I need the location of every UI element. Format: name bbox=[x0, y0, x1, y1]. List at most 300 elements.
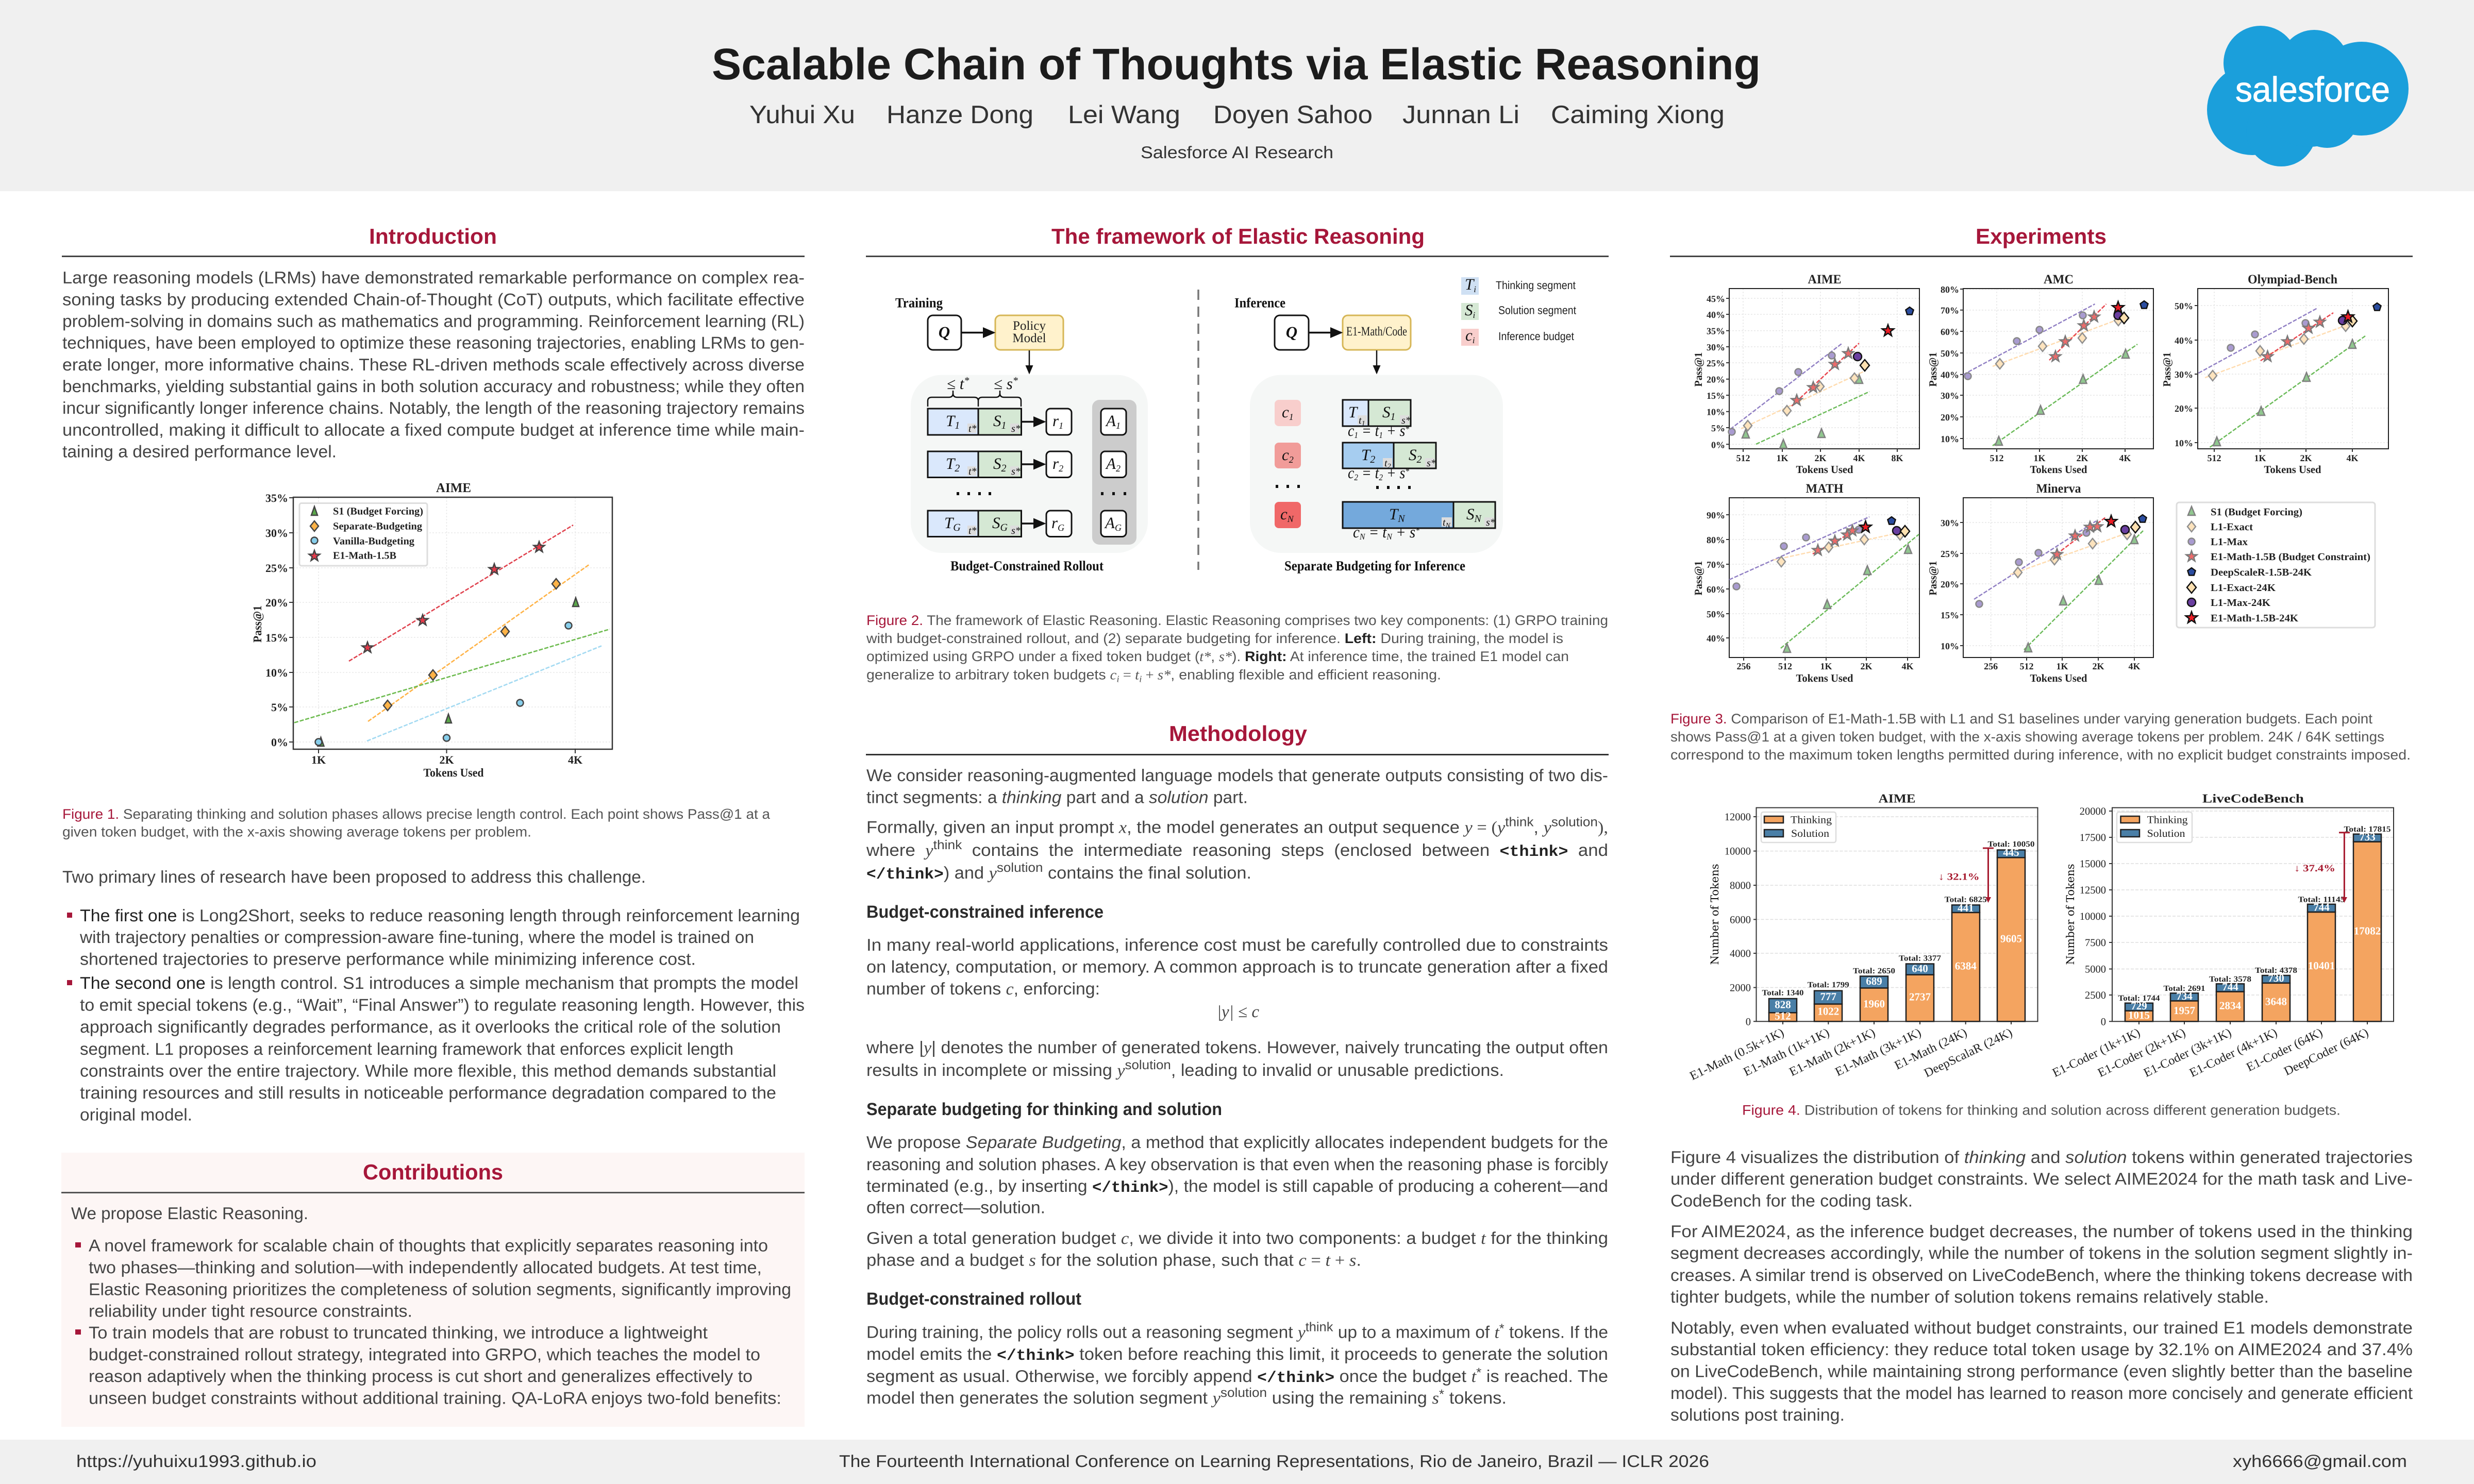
text block: budget-constrained rollout: * bbox=[1499, 1321, 1505, 1336]
legend: segment colours: S bbox=[1465, 301, 1473, 319]
x-axis labels: E1-Coder (3k+1K) bbox=[2142, 1026, 2234, 1080]
list: research lines: The second one is length control. S1 introduces a simple mechanism that prompts the model bbox=[80, 973, 798, 992]
budget segments: T bbox=[1389, 505, 1398, 523]
text block: problem setting: solution bbox=[1551, 815, 1598, 830]
axis tick labels: 25% bbox=[265, 562, 288, 575]
budget segments: t bbox=[1384, 458, 1388, 469]
chart: figure 3 MATH: 512 bbox=[1778, 661, 1792, 671]
budget segments: c bbox=[1348, 421, 1355, 440]
chart: figure 3 AIME: Tokens Used bbox=[1796, 463, 1853, 476]
axis tick labels: 30% bbox=[265, 527, 288, 539]
panel: framework of elastic reasoning bbox=[866, 224, 1609, 684]
chart: figure 3 Minerva: 20% bbox=[1941, 579, 1959, 589]
chart: figure 3 Minerva: 30% bbox=[1941, 518, 1959, 528]
axis tick labels: 1K bbox=[311, 753, 326, 766]
list: contributions bullets: Elastic Reasoning prioritizes the completeness of solution segments, significantly improving bbox=[89, 1280, 791, 1298]
bar values: Total: 1799 bbox=[1808, 981, 1849, 989]
rollout rows: G bbox=[1000, 522, 1008, 533]
text block: problem setting: ), bbox=[1598, 819, 1608, 837]
bar values: 9605 bbox=[2000, 933, 2022, 945]
rollout rows: S bbox=[992, 514, 1000, 532]
figure 2 caption: i bbox=[1139, 674, 1142, 684]
bar values: Total: 11145 bbox=[2298, 895, 2345, 904]
rollout rows: t* bbox=[968, 466, 977, 477]
chart: figure 3 AMC: 70% bbox=[1941, 306, 1959, 316]
bar values: 1015 bbox=[2128, 1009, 2150, 1021]
chart: figure 3 AIME: 0% bbox=[1711, 440, 1725, 450]
bar values bbox=[1762, 840, 2035, 1022]
bar values: 744 bbox=[2222, 981, 2238, 993]
legend: Solution bbox=[1791, 828, 1829, 839]
text block: problem setting: </think>) and y bbox=[866, 863, 996, 884]
chart: figure 3 AMC: AMC bbox=[2044, 273, 2074, 286]
header band bbox=[0, 0, 2474, 191]
list: research lines: original model. bbox=[80, 1105, 192, 1124]
legend: segment colours: c bbox=[1465, 326, 1473, 344]
text block: budget-constrained rollout: * bbox=[1476, 1365, 1482, 1380]
text block: separate budgeting: terminated (e.g., by inserting </think>), the model is still capable of producing a coherent—and bbox=[866, 1176, 1608, 1197]
figure 1 caption: Figure 1. Separating thinking and solution phases allows precise length control. Each point shows Pass@1 at a bbox=[62, 806, 771, 822]
list: contributions bullets: budget-constrained rollout strategy, integrated into GRPO, which teaches the model to bbox=[89, 1345, 760, 1364]
chart: figure 3 MATH: 1K bbox=[1820, 661, 1832, 671]
chart: figure 3 Minerva: Minerva bbox=[2036, 482, 2081, 496]
figure 1 caption: given token budget, with the x-axis showing average tokens per problem. bbox=[62, 824, 531, 840]
text block: experiments discussion: segment decreases accordingly, while the number of tokens in the solution segment slightly in- bbox=[1670, 1243, 2413, 1262]
chart: figure 3 Minerva: 2K bbox=[2092, 661, 2104, 671]
authors: Hanze Dong bbox=[887, 101, 1033, 129]
training diagram: Q bbox=[939, 323, 950, 341]
list: research lines: to emit special tokens (e.g., “Wait”, “Final Answer”) to regulate reasoning length. However, this bbox=[80, 996, 805, 1015]
text block: experiments discussion: substantial token efficiency: they reduce total token usage by 32.1% on AIME2024 and 37.4% bbox=[1670, 1340, 2413, 1359]
figure 3 caption: shows Pass@1 at a given token budget, with the x-axis showing average tokens per problem. 24K / 64K settings bbox=[1670, 729, 2384, 745]
chart: figure 3 MATH: 60% bbox=[1707, 584, 1725, 595]
text block: budget-constrained rollout: up to a maximum of bbox=[1333, 1322, 1494, 1342]
legend bbox=[1761, 812, 1836, 842]
legend: segment colours: i bbox=[1474, 284, 1476, 294]
budget segments: N bbox=[1386, 532, 1393, 542]
chart: figure 4 AIME stacked bars: 8000 bbox=[1730, 880, 1751, 891]
chart: figure 3 Olympiad-Bench: 20% bbox=[2175, 403, 2193, 414]
chart: figure 3 AMC: 2K bbox=[2076, 453, 2088, 463]
text block: problem setting: where y bbox=[866, 840, 933, 860]
budget segments: s* bbox=[1427, 458, 1436, 469]
text block: research lines lead-in: Two primary lines of research have been proposed to address this challenge. bbox=[62, 867, 646, 886]
bar values: 828 bbox=[1775, 998, 1791, 1010]
rollout rows: t* bbox=[968, 525, 977, 536]
chart: figure 3 MATH: 256 bbox=[1737, 661, 1750, 671]
text block: experiments discussion: For AIME2024, as the inference budget decreases, the number of tokens used in the thinking bbox=[1670, 1222, 2413, 1241]
text block: budget-constrained inference: number of tokens c, enforcing: bbox=[866, 979, 1100, 999]
chart: figure 3 Olympiad-Bench: 50% bbox=[2175, 301, 2193, 311]
chart: figure 3 Olympiad-Bench: 512 bbox=[2207, 453, 2221, 463]
rollout rows: G bbox=[953, 522, 961, 533]
x-axis labels: E1-Math (3k+1K) bbox=[1833, 1026, 1924, 1079]
text block: contributions intro: We propose Elastic Reasoning. bbox=[71, 1204, 308, 1223]
budget segments: 2 bbox=[1388, 463, 1391, 470]
legend: E1-Math-1.5B bbox=[333, 550, 396, 562]
figure 2 caption: i bbox=[1116, 674, 1119, 684]
chart: figure 4 LiveCodeBench stacked bars: 0 bbox=[2101, 1016, 2106, 1027]
budget segments: = t bbox=[1358, 464, 1380, 482]
budget braces: * bbox=[964, 375, 969, 386]
figure 1 caption bbox=[62, 806, 771, 840]
icon: salesforce cloud logo bbox=[2207, 26, 2409, 166]
legend bbox=[2117, 812, 2192, 842]
chart: figure 3 Olympiad-Bench bbox=[2161, 273, 2388, 476]
chart: figure 3 MATH bbox=[1692, 482, 1919, 684]
legend: segment colours: i bbox=[1473, 335, 1475, 345]
list: research lines: segment. L1 proposes a reinforcement learning framework that enforces explicit length bbox=[80, 1039, 733, 1058]
bars bbox=[2125, 834, 2381, 1021]
chart: figure 3 Olympiad-Bench: 40% bbox=[2175, 335, 2193, 346]
rollout rows: G bbox=[1058, 522, 1064, 533]
bar values: 1960 bbox=[1863, 998, 1885, 1010]
rollout rows: r bbox=[1052, 454, 1059, 473]
text block: budget-constrained inference: results in incomplete or missing y bbox=[866, 1060, 1125, 1080]
chart: figure 3 MATH: 70% bbox=[1707, 560, 1725, 570]
footer: email: xyh6666@gmail.com bbox=[2233, 1452, 2407, 1471]
legend: figure 3: L1-Exact bbox=[2211, 521, 2253, 533]
budget segments: N bbox=[1445, 522, 1451, 530]
legend: segment colours: Thinking segment bbox=[1496, 279, 1576, 292]
axis tick labels: 20% bbox=[265, 596, 288, 609]
budget segments: 1 bbox=[1379, 430, 1383, 440]
inference diagram: Q bbox=[1286, 323, 1297, 341]
answer column: A bbox=[1105, 514, 1115, 532]
budget segments: 2 bbox=[1370, 454, 1375, 465]
chart: figure 4 AIME stacked bars: 10000 bbox=[1725, 846, 1751, 857]
authors: Junnan Li bbox=[1402, 101, 1519, 129]
data points bbox=[315, 542, 579, 746]
list: contributions bullets: A novel framework for scalable chain of thoughts that explicitly separates reasoning into bbox=[89, 1236, 768, 1255]
figure 3 caption: Figure 3. Comparison of E1-Math-1.5B with L1 and S1 baselines under varying generation budgets. Each point bbox=[1670, 711, 2373, 727]
text block: introduction paragraph: incur significantly longer inference chains. Notably, the length of the reasoning trajectory remains bbox=[62, 398, 805, 417]
axis label: pass at 1: Pass@1 bbox=[251, 605, 264, 643]
text block: problem setting bbox=[866, 766, 1608, 884]
training diagram: Model bbox=[1012, 331, 1046, 345]
legend: S1 (Budget Forcing) bbox=[333, 506, 423, 517]
legend: figure 3: L1-Max bbox=[2211, 536, 2248, 548]
list: research lines: The first one is Long2Short, seeks to reduce reasoning length through reinforcement learning bbox=[80, 906, 800, 925]
arrow: reduction 37.4% bbox=[2294, 833, 2350, 903]
text block: budget-constrained rollout: During training, the policy rolls out a reasoning segment y bbox=[866, 1322, 1306, 1342]
x-axis labels bbox=[2050, 1026, 2371, 1080]
rollout rows: 2 bbox=[1001, 463, 1006, 474]
x-axis labels bbox=[1687, 1026, 2015, 1083]
training diagram: Policy bbox=[1013, 319, 1046, 333]
answer column: 1 bbox=[1116, 420, 1121, 431]
chart: figure 4 AIME stacked bars: 6000 bbox=[1730, 914, 1751, 925]
figure 4 caption: Figure 4. Distribution of tokens for thinking and solution across different generation budgets. bbox=[1742, 1103, 2341, 1118]
heading: framework: The framework of Elastic Reasoning bbox=[1051, 224, 1425, 248]
chart: figure 3 AIME: 512 bbox=[1736, 453, 1750, 463]
figure 2 caption: s*, enabling flexible and efficient reasoning. bbox=[1158, 667, 1426, 682]
text block: problem setting: think bbox=[933, 838, 962, 852]
rollout rows: T bbox=[946, 412, 955, 430]
list: research lines: constraints over the entire trajectory. While more flexible, this method demands substantial bbox=[80, 1061, 776, 1080]
chart: figure 3 AMC: 60% bbox=[1941, 327, 1959, 337]
bar values: 733 bbox=[2359, 831, 2376, 843]
rollout rows: r bbox=[1052, 412, 1059, 430]
axis tick labels: 10% bbox=[265, 666, 288, 679]
bar values bbox=[2118, 825, 2391, 1021]
text block: separate budgeting bbox=[866, 1133, 1608, 1270]
budget segments: * bbox=[1405, 466, 1409, 476]
chart: figure 3 AIME: 4K bbox=[1853, 453, 1865, 463]
inference diagram: E1-Math/Code bbox=[1346, 325, 1407, 339]
rollout rows: S bbox=[993, 454, 1001, 473]
budget segments: 2 bbox=[1379, 473, 1383, 482]
chart: figure 3 AMC: 50% bbox=[1941, 348, 1959, 359]
trend lines bbox=[294, 525, 610, 741]
bar values: 730 bbox=[2268, 972, 2284, 984]
bar values: 729 bbox=[2131, 1000, 2147, 1012]
chart: figure 3 Minerva: 10% bbox=[1941, 641, 1959, 651]
budget segments: + s bbox=[1392, 523, 1415, 541]
chart: figure 4 AIME stacked bars: AIME bbox=[1878, 792, 1915, 806]
budget segments: s* bbox=[1401, 415, 1411, 426]
answer column bbox=[1092, 400, 1136, 545]
arrow: reduction 32.1%: ↓ 32.1% bbox=[1938, 872, 1980, 882]
bar values: 2737 bbox=[1909, 991, 1931, 1003]
affiliation: Salesforce AI Research bbox=[1141, 143, 1333, 162]
list: research lines bbox=[67, 906, 805, 1124]
chart: figure 4 AIME stacked bars: 4000 bbox=[1730, 948, 1751, 959]
text block: budget-constrained rollout bbox=[866, 1320, 1608, 1408]
figure 2 caption: Figure 2. The framework of Elastic Reasoning. Elastic Reasoning comprises two key components: (1) GRPO training bbox=[866, 613, 1608, 628]
axis tick labels: 15% bbox=[265, 631, 288, 644]
caption: separate budgeting: Separate Budgeting for Inference bbox=[1284, 558, 1465, 574]
text block: problem setting: , bbox=[1533, 818, 1544, 837]
bar values: Total: 17815 bbox=[2344, 825, 2391, 834]
chart: figure 3 AMC bbox=[1927, 273, 2153, 476]
list: contributions bullets: reliability under tight resource constraints. bbox=[89, 1302, 412, 1321]
chart: figure 3 Minerva: 256 bbox=[1984, 661, 1998, 671]
chart: figure 3 AIME: 5% bbox=[1711, 423, 1725, 433]
list: contributions bullets: To train models that are robust to truncated thinking, we introduce a lightweight bbox=[89, 1323, 708, 1342]
equation: |y| ≤ c bbox=[1217, 1003, 1259, 1021]
chart: figure 3 MATH: 80% bbox=[1707, 535, 1725, 545]
inference diagram bbox=[1234, 295, 1503, 574]
chart: figure 3 AIME: 45% bbox=[1707, 294, 1725, 304]
x-axis labels: E1-Math (0.5k+1K) bbox=[1687, 1026, 1786, 1083]
rollout rows: 1 bbox=[1001, 420, 1006, 431]
chart: figure 3 AIME: 30% bbox=[1707, 342, 1725, 352]
text block: experiments discussion: Notably, even when evaluated without budget constraints, our trained E1 models demonstrate bbox=[1670, 1318, 2413, 1337]
legend: Thinking bbox=[1791, 815, 1832, 826]
text block: budget-constrained rollout: model emits the </think> token before reaching this limit, it proceeds to generate the solution bbox=[866, 1344, 1608, 1365]
x-axis labels: DeepScalaR (24K) bbox=[1922, 1026, 2015, 1080]
budget chips: c bbox=[1282, 446, 1289, 464]
bar values: 441 bbox=[1958, 902, 1974, 914]
budget segments: T bbox=[1348, 403, 1359, 421]
budget segments: 2 bbox=[1354, 473, 1358, 482]
legend: figure 3: S1 (Budget Forcing) bbox=[2211, 507, 2302, 518]
chart: figure 3 AMC: 40% bbox=[1941, 370, 1959, 380]
chart: figure 4 AIME stacked bars: 2000 bbox=[1730, 982, 1751, 993]
chart: figure 3 Olympiad-Bench: 1K bbox=[2254, 453, 2266, 463]
list: contributions bullets bbox=[75, 1236, 791, 1408]
chart: figure 3 AMC: 20% bbox=[1941, 412, 1959, 423]
list: research lines: training resources and still results in noticeable performance degradation compared to the bbox=[80, 1083, 776, 1102]
figure 2 caption bbox=[866, 613, 1608, 684]
budget segments: 2 bbox=[1416, 454, 1422, 465]
chart: figure 3 AMC: Pass@1 bbox=[1927, 352, 1939, 386]
authors: Lei Wang bbox=[1068, 101, 1180, 129]
budget segments: N bbox=[1359, 532, 1366, 542]
bar values: 6384 bbox=[1955, 960, 1977, 972]
chart: figure 3 Olympiad-Bench: Olympiad-Bench bbox=[2248, 273, 2337, 286]
answer column: G bbox=[1115, 522, 1122, 533]
figure 2 caption: + bbox=[1142, 667, 1158, 682]
legend: figure 3 bbox=[2177, 502, 2375, 628]
budget segments: = t bbox=[1358, 421, 1380, 440]
text block: introduction paragraph: techniques, have been employed to optimize these reasoning trajectories, enabling LRMs to gen- bbox=[62, 333, 805, 352]
budget chips: c bbox=[1282, 403, 1289, 421]
chart: figure 4 AIME stacked bars: Number of Tokens bbox=[1709, 864, 1721, 965]
legend: figure 3: E1-Math-1.5B-24K bbox=[2211, 613, 2298, 624]
chart: figure 3 MATH: Tokens Used bbox=[1796, 672, 1853, 684]
chart: figure 3 MATH: 40% bbox=[1707, 633, 1725, 644]
list: research lines: shortened trajectories to preserve performance while minimizing inference cost. bbox=[80, 949, 696, 968]
authors: Doyen Sahoo bbox=[1213, 101, 1373, 129]
chart: figure 3 Minerva: 25% bbox=[1941, 549, 1959, 559]
legend: Thinking bbox=[2147, 815, 2188, 826]
chart: figure 3 AIME bbox=[1692, 273, 1919, 476]
rollout rows: 1 bbox=[1059, 420, 1063, 431]
answer column: A bbox=[1106, 412, 1116, 430]
label: training: Training bbox=[895, 295, 943, 310]
budget segments: * bbox=[1415, 526, 1419, 535]
bar values: Total: 3377 bbox=[1899, 954, 1941, 963]
legend: segment colours: Inference budget bbox=[1498, 330, 1574, 343]
text block: budget-constrained inference: on latency, computation, or memory. A common approach is to truncate generation after a fixed bbox=[866, 957, 1608, 976]
budget chips bbox=[1275, 400, 1301, 528]
chart: figure 3 MATH: 2K bbox=[1860, 661, 1873, 671]
budget segments: + s bbox=[1383, 464, 1405, 482]
chart: figure 4 LiveCodeBench stacked bars: 12500 bbox=[2080, 885, 2106, 896]
list: contributions bullets: unseen budget constraints without additional training. QA-LoRA enjoys two-fold benefits: bbox=[89, 1389, 781, 1408]
legend: segment colours: Solution segment bbox=[1498, 304, 1576, 316]
x-axis labels: E1-Math (24K) bbox=[1893, 1026, 1969, 1072]
text block: budget-constrained rollout: * bbox=[1439, 1387, 1444, 1402]
chart: figure 3 Olympiad-Bench: 30% bbox=[2175, 369, 2193, 380]
text block: budget-constrained rollout: tokens. If the bbox=[1505, 1322, 1608, 1342]
rollout rows: T bbox=[944, 514, 953, 532]
chart: figure 3 AIME: 8K bbox=[1891, 453, 1903, 463]
budget segments bbox=[1343, 400, 1495, 542]
axis tick labels: 0% bbox=[271, 736, 288, 749]
budget chips: 1 bbox=[1289, 412, 1294, 422]
budget segments: * bbox=[1405, 424, 1409, 434]
budget chips: 2 bbox=[1289, 454, 1294, 465]
text block: budget-constrained rollout: s bbox=[1432, 1389, 1439, 1408]
chart: figure 3 AMC: 1K bbox=[2033, 453, 2046, 463]
answer column: 2 bbox=[1116, 463, 1121, 474]
list: contributions bullets: two phases—thinking and solution—with independently allocated budgets. At test time, bbox=[89, 1258, 762, 1277]
budget braces bbox=[928, 375, 1021, 407]
budget chips: N bbox=[1287, 514, 1294, 524]
training diagram bbox=[895, 295, 1148, 574]
chart: figure 3 AIME: 40% bbox=[1707, 310, 1725, 320]
chart: figure 3 Olympiad-Bench: Pass@1 bbox=[2161, 352, 2173, 386]
figure 2 caption: optimized using GRPO under a fixed token budget ( t*, s*). Right: At inference time, the trained E1 model can bbox=[866, 649, 1569, 664]
bar values: 734 bbox=[2176, 990, 2193, 1002]
budget braces: * bbox=[1013, 375, 1018, 386]
chart: figure 3 Minerva: 15% bbox=[1941, 610, 1959, 620]
footer band bbox=[0, 1440, 2474, 1484]
text block: budget-constrained rollout: t bbox=[1494, 1323, 1500, 1342]
chart: figure 4 AIME stacked bars: 0 bbox=[1746, 1016, 1751, 1027]
chart: figure 3 Olympiad-Bench: Tokens Used bbox=[2264, 463, 2321, 476]
text block: introduction paragraph: soning tasks by producing extended Chain-of-Thought (CoT) outputs, which facilitate effective bbox=[62, 290, 805, 309]
text block: budget-constrained rollout: solution bbox=[1221, 1386, 1267, 1400]
list: research lines: with trajectory penalties or compression-aware fine-tuning, where the model is trained on bbox=[79, 927, 754, 947]
chart: figure 4 LiveCodeBench stacked bars: 15000 bbox=[2080, 858, 2106, 870]
footer: conference: The Fourteenth International Conference on Learning Representations, Rio de Janeiro, Brazil — ICLR 2026 bbox=[839, 1452, 1709, 1471]
text block: budget-constrained inference: where |y| denotes the number of generated tokens. However, naively truncating the output often bbox=[866, 1038, 1608, 1057]
authors: Yuhui Xu bbox=[749, 101, 855, 129]
budget braces: ≤ t bbox=[947, 375, 964, 393]
bar values: 1022 bbox=[1817, 1005, 1839, 1018]
chart: figure 3 AIME: Pass@1 bbox=[1692, 352, 1704, 386]
text block: problem setting: contains the intermediate reasoning steps (enclosed between bbox=[962, 840, 1500, 859]
axis label: tokens used: Tokens Used bbox=[424, 766, 484, 779]
rollout rows: s* bbox=[1011, 525, 1021, 536]
chart: figure 3 Olympiad-Bench: 10% bbox=[2175, 438, 2193, 448]
text block: problem setting: y bbox=[1542, 819, 1551, 837]
x-axis labels: E1-Coder (4k+1K) bbox=[2187, 1026, 2280, 1080]
chart: figure 1 AIME scatter bbox=[251, 480, 612, 779]
bar values: 1957 bbox=[2174, 1004, 2195, 1017]
chart: figure 3 AIME: 25% bbox=[1707, 358, 1725, 368]
bar values: Total: 3578 bbox=[2209, 975, 2251, 984]
text block: experiments discussion: under different generation budget constraints. We select AIME2024 for the math task and Live- bbox=[1670, 1169, 2413, 1188]
bar values: 689 bbox=[1866, 975, 1882, 987]
rollout rows: 2 bbox=[955, 463, 960, 474]
text block: experiments discussion: CodeBench for the coding task. bbox=[1670, 1191, 1913, 1210]
chart: figure 4 AIME stacked bars bbox=[1687, 792, 2038, 1083]
legend: segment colours bbox=[1461, 275, 1576, 346]
chart: figure 3 AIME: 2K bbox=[1814, 453, 1827, 463]
chart: figure 3 Minerva: Pass@1 bbox=[1927, 561, 1939, 596]
list: research lines: approach significantly degrades performance, as it overlooks the critical role of the solution bbox=[80, 1017, 781, 1036]
chart: figure 3 AIME: 15% bbox=[1707, 391, 1725, 401]
rollout rows: t* bbox=[968, 423, 977, 434]
chart: figure 3 AIME: 1K bbox=[1776, 453, 1788, 463]
text block: problem setting: contains the final solution. bbox=[1043, 863, 1251, 882]
figure 3 caption: correspond to the maximum token lengths permitted during inference, with no explicit budget constraints imposed. bbox=[1670, 747, 2411, 763]
x-axis labels: E1-Coder (1k+1K) bbox=[2050, 1026, 2143, 1080]
text block: budget-constrained inference: solution bbox=[1125, 1058, 1171, 1072]
bar values: Total: 1340 bbox=[1762, 988, 1804, 997]
budget segments: s* bbox=[1486, 517, 1495, 528]
budget segments: t bbox=[1359, 415, 1362, 426]
chart: figure 4 LiveCodeBench stacked bars: 17500 bbox=[2080, 832, 2106, 844]
chart: figure 3 Olympiad-Bench: 4K bbox=[2346, 453, 2359, 463]
legend: figure 3: DeepScaleR-1.5B-24K bbox=[2211, 567, 2312, 578]
chart: figure 3 AMC: 4K bbox=[2119, 453, 2131, 463]
legend: Vanilla-Budgeting bbox=[333, 536, 414, 547]
text block: budget-constrained rollout: segment as usual. Otherwise, we forcibly append </think> once the budget t bbox=[866, 1367, 1476, 1387]
icon: salesforce cloud logo: salesforce bbox=[2235, 70, 2390, 109]
chart: figure 3 AIME: 35% bbox=[1707, 326, 1725, 336]
panel: methodology bbox=[866, 721, 1609, 1408]
text block: budget-constrained inference bbox=[866, 935, 1608, 1080]
subheading: separate budgeting: Separate budgeting for thinking and solution bbox=[866, 1100, 1222, 1119]
chart: figure 3 AMC: 10% bbox=[1941, 434, 1959, 444]
text block: problem setting: tinct segments: a thinking part and a solution part. bbox=[866, 788, 1248, 807]
